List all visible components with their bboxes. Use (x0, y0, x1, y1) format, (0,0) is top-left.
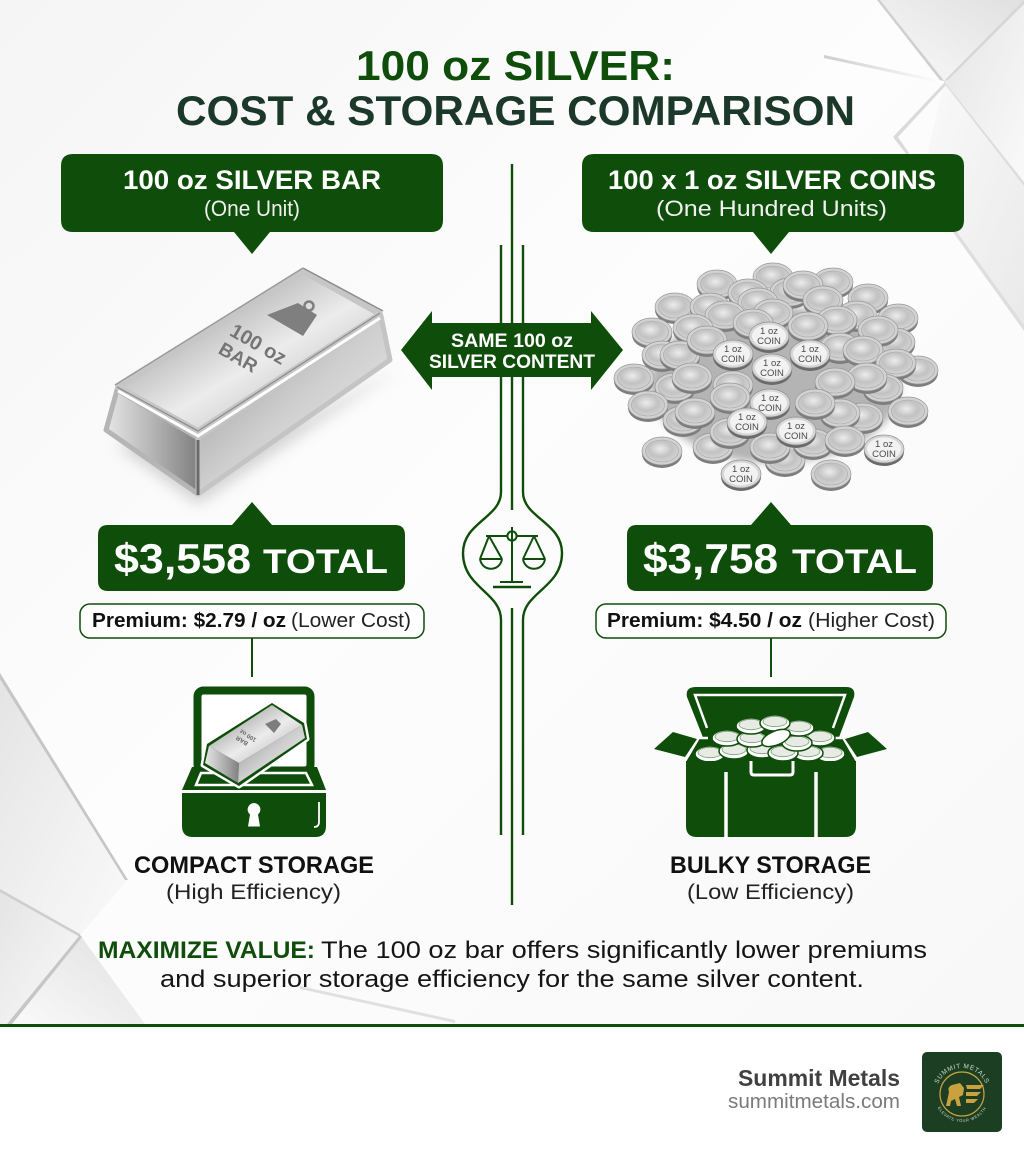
premium pill: coins (596, 604, 946, 638)
icon: silver bar (106, 268, 400, 505)
brand name: Summit Metals (738, 1065, 900, 1091)
icon: coin pile: 1 oz (787, 421, 805, 432)
label: compact storage: (High Efficiency) (166, 881, 341, 904)
icon: compact storage box (182, 690, 326, 837)
logo (922, 1052, 1002, 1132)
keyhole (248, 803, 260, 826)
panel: coins heading callout (582, 154, 964, 254)
premium pill: bar (80, 604, 424, 638)
icon: coin pile: COIN (798, 354, 822, 365)
footer (0, 1024, 1024, 1132)
icon: silver bar: BAR (215, 339, 261, 378)
central divider lines with scale (463, 164, 562, 905)
label: compact storage: COMPACT STORAGE (134, 852, 374, 879)
panel: bar heading callout: (One Unit) (204, 196, 300, 221)
icon: small silver bar (203, 703, 307, 786)
icon: coin pile: 1 oz (761, 393, 779, 404)
price box: bar total: TOTAL (263, 543, 388, 581)
logo: SUMMIT METALS (934, 1064, 990, 1084)
icon: coin pile: 1 oz (875, 439, 893, 450)
icon: coin pile: COIN (872, 449, 896, 460)
icon: silver bar: 100 oz (226, 320, 290, 370)
label: bulky storage (670, 852, 871, 904)
conclusion text: and superior storage efficiency for the same silver content. (160, 966, 864, 993)
icon: coin pile (614, 263, 938, 491)
label: bulky storage: (Low Efficiency) (687, 881, 854, 904)
icon: small silver bar: 100 oz (239, 727, 258, 742)
conclusion text (98, 937, 927, 993)
icon: coin pile: 1 oz (763, 358, 781, 369)
icon: coin pile: COIN (784, 431, 808, 442)
label: compact storage (134, 852, 374, 904)
brand name: summitmetals.com (728, 1091, 900, 1113)
icon: weight stamp (267, 302, 317, 336)
panel: coins heading callout: 100 x 1 oz SILVER COINS (608, 165, 936, 195)
icon: coin pile: COIN (760, 368, 784, 379)
title: 100 oz SILVER: (356, 42, 675, 89)
icon: coin pile: 1 oz (801, 344, 819, 355)
panel: bar heading callout: 100 oz SILVER BAR (123, 165, 381, 195)
icon: coin pile: 1 oz (738, 412, 756, 423)
brand name (728, 1065, 900, 1113)
premium pill: bar: (Lower Cost) (291, 610, 411, 632)
arrow: same silver content: SILVER CONTENT (429, 352, 595, 373)
title: COST & STORAGE COMPARISON (176, 87, 855, 134)
panel: coins heading callout: (One Hundred Units) (656, 196, 887, 221)
coins in chest (695, 715, 845, 762)
icon: balance scale (480, 527, 545, 587)
icon: coin pile: 1 oz (760, 326, 778, 337)
premium pill: coins: (Higher Cost) (808, 610, 935, 632)
price box: bar total: $3,558 (114, 535, 251, 582)
icon: coin pile: 1 oz (732, 464, 750, 475)
icon: coin pile: 1 oz (724, 344, 742, 355)
icon: coin pile: COIN (729, 474, 753, 485)
title (176, 42, 855, 134)
price box: coins total (627, 502, 933, 591)
connector lines (252, 638, 771, 677)
icon: coin pile: COIN (735, 422, 759, 433)
icon: small silver bar: BAR (235, 734, 250, 746)
arrow: same silver content (401, 311, 623, 390)
icon: bulky storage chest (654, 687, 887, 837)
premium pill: bar: Premium: $2.79 / oz (92, 610, 286, 632)
logo: ELEVATE YOUR WEALTH (938, 1106, 986, 1122)
icon: coin pile: COIN (758, 403, 782, 414)
conclusion text: The 100 oz bar offers significantly lower premiums (321, 937, 927, 964)
price box: coins total: TOTAL (792, 543, 917, 581)
price box: bar total (98, 502, 405, 591)
conclusion text: MAXIMIZE VALUE: (98, 937, 315, 964)
icon: coin pile: COIN (721, 354, 745, 365)
premium pill: coins: Premium: $4.50 / oz (607, 610, 802, 632)
price box: coins total: $3,758 (643, 535, 778, 582)
icon: coin pile: COIN (757, 336, 781, 347)
panel: bar heading callout (61, 154, 443, 254)
label: bulky storage: BULKY STORAGE (670, 852, 871, 879)
arrow: same silver content: SAME 100 oz (451, 331, 573, 352)
